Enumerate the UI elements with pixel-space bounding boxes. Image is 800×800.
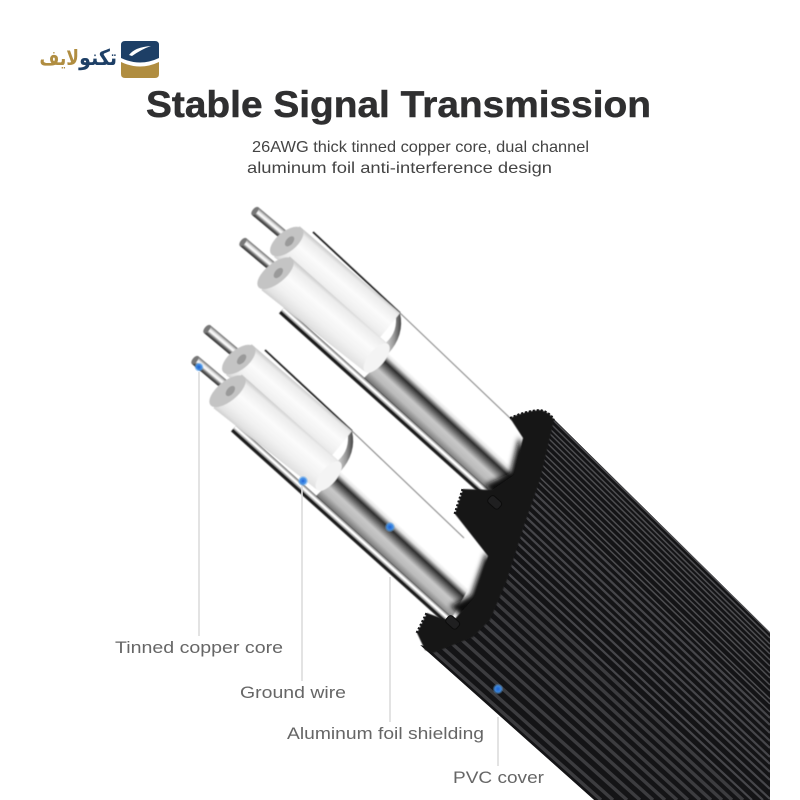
subtitle: aluminum foil anti-interference design bbox=[247, 160, 552, 177]
aluminum foil cylinder bbox=[362, 350, 518, 505]
logo wordmark bbox=[40, 45, 117, 70]
label: aluminum foil shielding: Aluminum foil shielding bbox=[287, 725, 484, 743]
marker: aluminum foil bbox=[384, 522, 396, 532]
PVC cable jacket bbox=[420, 418, 770, 800]
title: Stable Signal Transmission bbox=[146, 84, 651, 125]
label: tinned copper core: Tinned copper core bbox=[115, 639, 283, 657]
marker: PVC cover bbox=[492, 684, 504, 694]
front core and insulation bbox=[224, 225, 398, 381]
label: PVC cover: PVC cover bbox=[453, 769, 545, 787]
logo bbox=[40, 41, 159, 78]
cable end face bbox=[417, 410, 554, 653]
subtitle bbox=[247, 139, 589, 177]
logo mark bbox=[121, 41, 159, 78]
label: ground wire: Ground wire bbox=[240, 684, 346, 702]
upper wire pair bbox=[224, 195, 518, 505]
lower wire pair bbox=[176, 313, 470, 623]
back core and insulation bbox=[237, 195, 403, 344]
ground wire bbox=[282, 309, 498, 503]
foil end shadow bbox=[450, 437, 530, 625]
leader lines bbox=[199, 372, 498, 766]
back insulation curved cut bbox=[383, 313, 401, 354]
subtitle: 26AWG thick tinned copper core, dual channel bbox=[252, 139, 589, 156]
logo wordmark: تکنو bbox=[78, 45, 117, 70]
marker: tinned copper core bbox=[194, 362, 204, 372]
logo wordmark: لایف bbox=[40, 45, 79, 70]
marker: ground wire bbox=[298, 476, 308, 486]
jacket ribs bbox=[430, 420, 770, 800]
foil sheet edge line bbox=[313, 232, 512, 420]
ground wire end caps bbox=[444, 494, 503, 630]
